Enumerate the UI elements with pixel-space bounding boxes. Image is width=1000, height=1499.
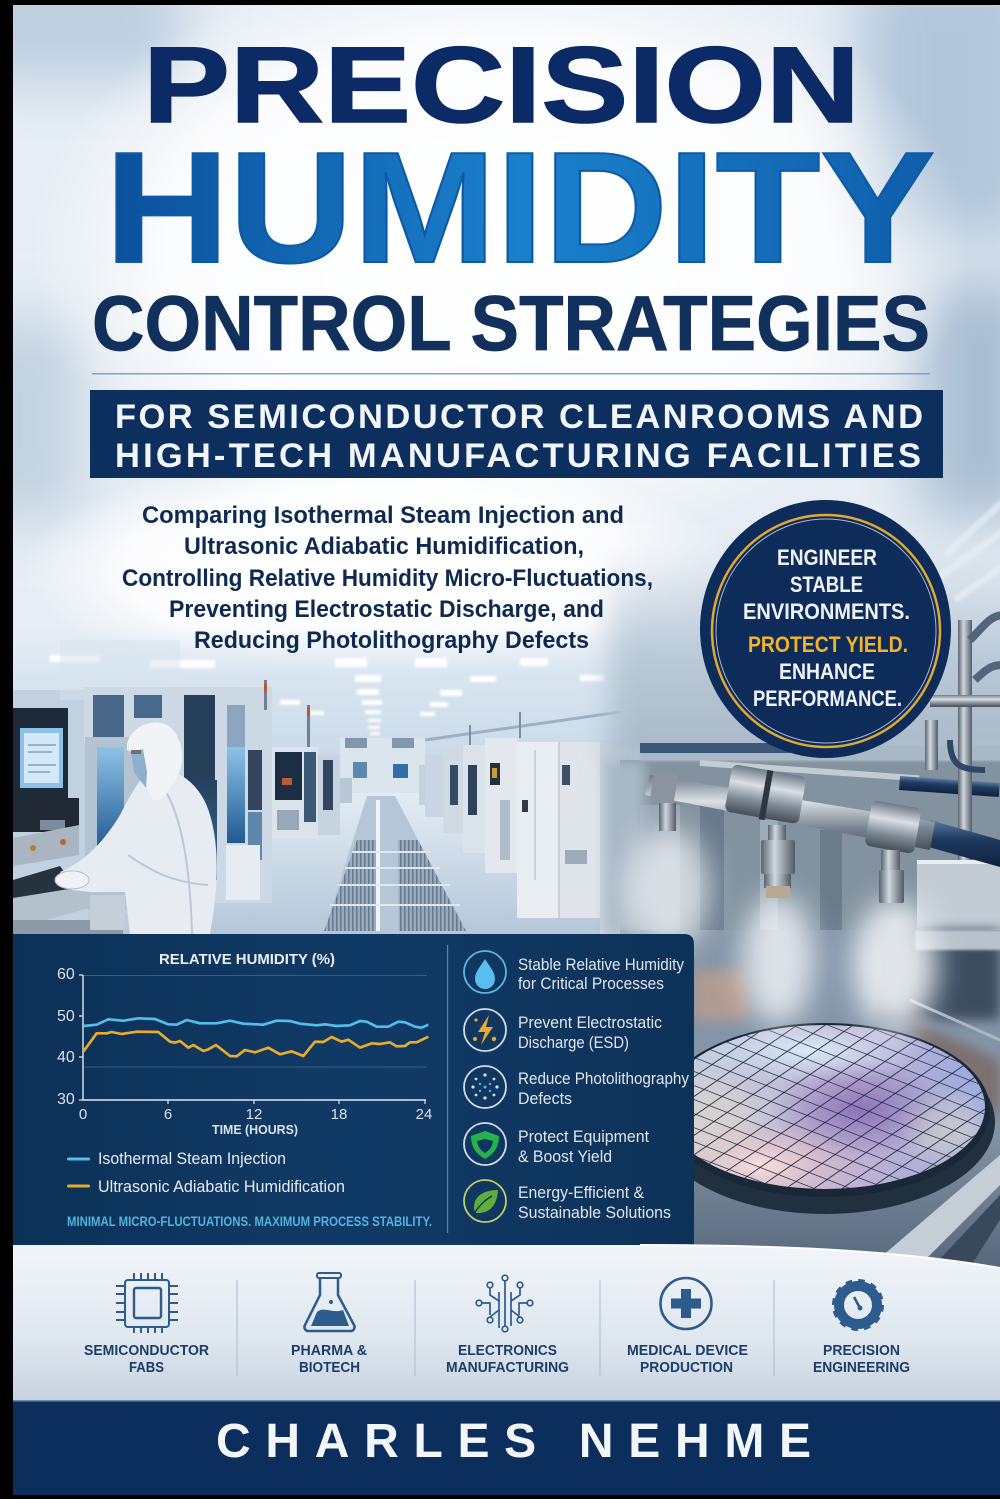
data line: isothermal steam [83, 1018, 428, 1028]
upper cabinet [84, 687, 169, 742]
line chart: relative humidity: 50 [57, 1008, 75, 1025]
description text: Controlling Relative Humidity Micro-Fluctuations, [122, 565, 653, 592]
lower right photo: steel bench behind wafer [640, 921, 1000, 1130]
grate strip [332, 796, 436, 908]
line chart: relative humidity: 24 [416, 1106, 432, 1123]
description text: Reducing Photolithography Defects [194, 627, 589, 654]
subtitle banner: FOR SEMICONDUCTOR CLEANROOMS AND [115, 398, 923, 436]
body [60, 765, 217, 934]
benefit: protect equipment: & Boost Yield [518, 1147, 612, 1166]
nozzle 3 [881, 850, 900, 870]
icon: chip [116, 1273, 178, 1333]
icon: flask [304, 1273, 355, 1331]
icon: wafer on chuck [694, 1023, 1000, 1267]
benefit: reduce defects: Defects [518, 1089, 572, 1108]
cleanroom photo: corridor [13, 639, 617, 934]
line chart: relative humidity: 30 [57, 1091, 75, 1108]
ceiling [13, 639, 617, 755]
icon: medical [660, 1278, 712, 1329]
description text: Ultrasonic Adiabatic Humidification, [184, 533, 584, 560]
benefit: prevent ESD: Discharge (ESD) [518, 1033, 629, 1052]
benefit: energy efficient: Sustainable Solutions [518, 1203, 671, 1222]
benefit: prevent ESD [464, 1009, 662, 1052]
title line: precision: PRECISION [143, 24, 860, 145]
description text [122, 502, 653, 654]
industry labels: ELECTRONICS [458, 1343, 557, 1359]
description text: Comparing Isothermal Steam Injection and [142, 502, 624, 529]
benefit: energy efficient: Energy-Efficient & [518, 1183, 645, 1202]
background: light blue cover gradient [0, 0, 1000, 795]
subtitle banner [90, 390, 943, 478]
line chart: relative humidity: 12 [246, 1106, 262, 1123]
sky streaks [935, 500, 1000, 600]
author bar: CHARLES NEHME [216, 1415, 811, 1468]
cleanroom photo: left machines [13, 640, 352, 930]
badge: engineer stable environments: PROTECT YIELD. [748, 632, 908, 657]
chart legend: Isothermal Steam Injection [98, 1149, 286, 1168]
line chart: relative humidity [57, 951, 432, 1137]
floor [88, 794, 600, 934]
chart legend [67, 1149, 345, 1196]
nozzle manifold [645, 764, 1000, 903]
cleanroom photo: right machines [419, 712, 630, 935]
title line: control strategies: CONTROL STRATEGIES [92, 279, 930, 367]
badge: engineer stable environments: STABLE [790, 572, 863, 597]
chart tagline: MINIMAL MICRO-FLUCTUATIONS. MAXIMUM PROCESS STABILITY. [67, 1214, 432, 1229]
icon: gear [834, 1281, 882, 1329]
glove [55, 871, 89, 889]
industry labels: SEMICONDUCTOR [84, 1343, 210, 1359]
industry labels: ENGINEERING [813, 1360, 910, 1376]
benefit: stable humidity: Stable Relative Humidity [518, 955, 684, 974]
right photo: pipework and steel backdrop [605, 500, 1000, 935]
machine 3 [272, 747, 318, 798]
panel divider [447, 945, 448, 1233]
benefit: reduce defects: Reduce Photolithography [518, 1069, 689, 1088]
nozzle 1 [659, 803, 676, 831]
title line: humidity: HUMIDITY [105, 120, 935, 296]
back pipes [640, 743, 790, 753]
icon: electronics [476, 1275, 533, 1332]
line chart: relative humidity: 60 [57, 966, 75, 983]
benefit: protect equipment [464, 1123, 649, 1166]
benefit: stable humidity: for Critical Processes [518, 974, 664, 993]
subtitle banner: HIGH-TECH MANUFACTURING FACILITIES [115, 437, 921, 475]
line chart: relative humidity: 18 [331, 1106, 347, 1123]
cabinet 2 [166, 687, 272, 903]
line chart: relative humidity: 40 [57, 1049, 75, 1066]
benefit: reduce defects [464, 1066, 689, 1108]
line chart: relative humidity: TIME (HOURS) [212, 1122, 298, 1137]
cleanroom worker [55, 723, 217, 934]
cabinet 1 [85, 737, 129, 862]
industry labels: MANUFACTURING [446, 1360, 569, 1376]
line chart: relative humidity: RELATIVE HUMIDITY (%) [159, 951, 335, 968]
far wall [340, 738, 425, 794]
industry labels: FABS [129, 1360, 164, 1376]
benefit: stable humidity [464, 951, 684, 993]
cleanroom photo: operator console and monitor [13, 708, 125, 934]
industry labels: PRODUCTION [640, 1360, 733, 1376]
panel: chart and benefits [13, 934, 694, 1245]
title [94, 46, 934, 352]
author bar [13, 1400, 1000, 1495]
badge: engineer stable environments [700, 500, 951, 758]
line chart: relative humidity: 0 [79, 1106, 87, 1123]
badge: engineer stable environments: ENGINEER [777, 545, 877, 570]
badge: engineer stable environments: PERFORMANCE. [753, 686, 902, 711]
industries strip [13, 1245, 1000, 1400]
title rule [92, 373, 930, 374]
benefit: energy efficient [464, 1180, 671, 1222]
status beacons [264, 680, 267, 710]
line chart: relative humidity: 6 [164, 1106, 172, 1123]
benefit: protect equipment: Protect Equipment [518, 1127, 649, 1146]
industry labels: PHARMA & [291, 1343, 368, 1359]
grate highlights [330, 852, 460, 905]
industry labels [84, 1343, 910, 1376]
industry labels: BIOTECH [299, 1360, 360, 1376]
face [131, 749, 147, 788]
industry labels: MEDICAL DEVICE [627, 1343, 748, 1359]
badge: engineer stable environments: ENVIRONMENTS. [743, 599, 910, 624]
industry labels: PRECISION [823, 1343, 900, 1359]
nozzle 2 [768, 825, 786, 840]
data line: ultrasonic adiabatic [83, 1032, 428, 1056]
hood [127, 723, 182, 801]
badge: engineer stable environments: ENHANCE [779, 659, 875, 684]
description text: Preventing Electrostatic Discharge, and [169, 596, 604, 623]
chart legend: Ultrasonic Adiabatic Humidification [98, 1177, 345, 1196]
benefit: prevent ESD: Prevent Electrostatic [518, 1013, 662, 1032]
steam plumes [626, 828, 937, 1030]
